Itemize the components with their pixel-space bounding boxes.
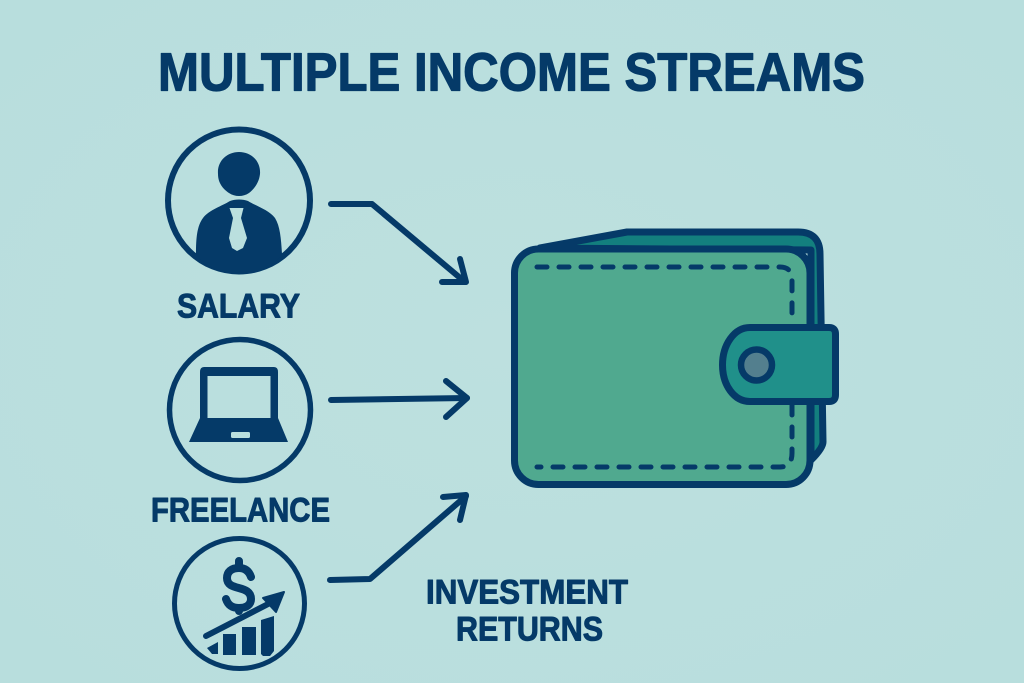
title: MULTIPLE INCOME STREAMS (158, 42, 865, 102)
icon: freelance laptop (170, 340, 310, 480)
icon: wallet (514, 232, 836, 484)
wallet back (540, 232, 823, 460)
label: salary: SALARY (177, 288, 300, 326)
arrow: freelance to wallet (331, 381, 467, 417)
clasp (722, 328, 836, 402)
stitching (537, 267, 792, 467)
icon: investment growth (174, 538, 304, 668)
label: investment returns: RETURNS (456, 610, 603, 648)
arrow: salary to wallet (331, 204, 466, 282)
label: investment returns: INVESTMENT (426, 574, 628, 612)
wallet body (514, 249, 810, 484)
icon: salary person (168, 130, 310, 274)
label: investment returns (426, 574, 628, 648)
label: freelance: FREELANCE (151, 492, 330, 530)
arrow: investment to wallet (330, 495, 466, 580)
bars (207, 616, 274, 656)
rising arrow (206, 592, 284, 636)
snap button (741, 350, 772, 380)
dollar sign (226, 561, 251, 611)
